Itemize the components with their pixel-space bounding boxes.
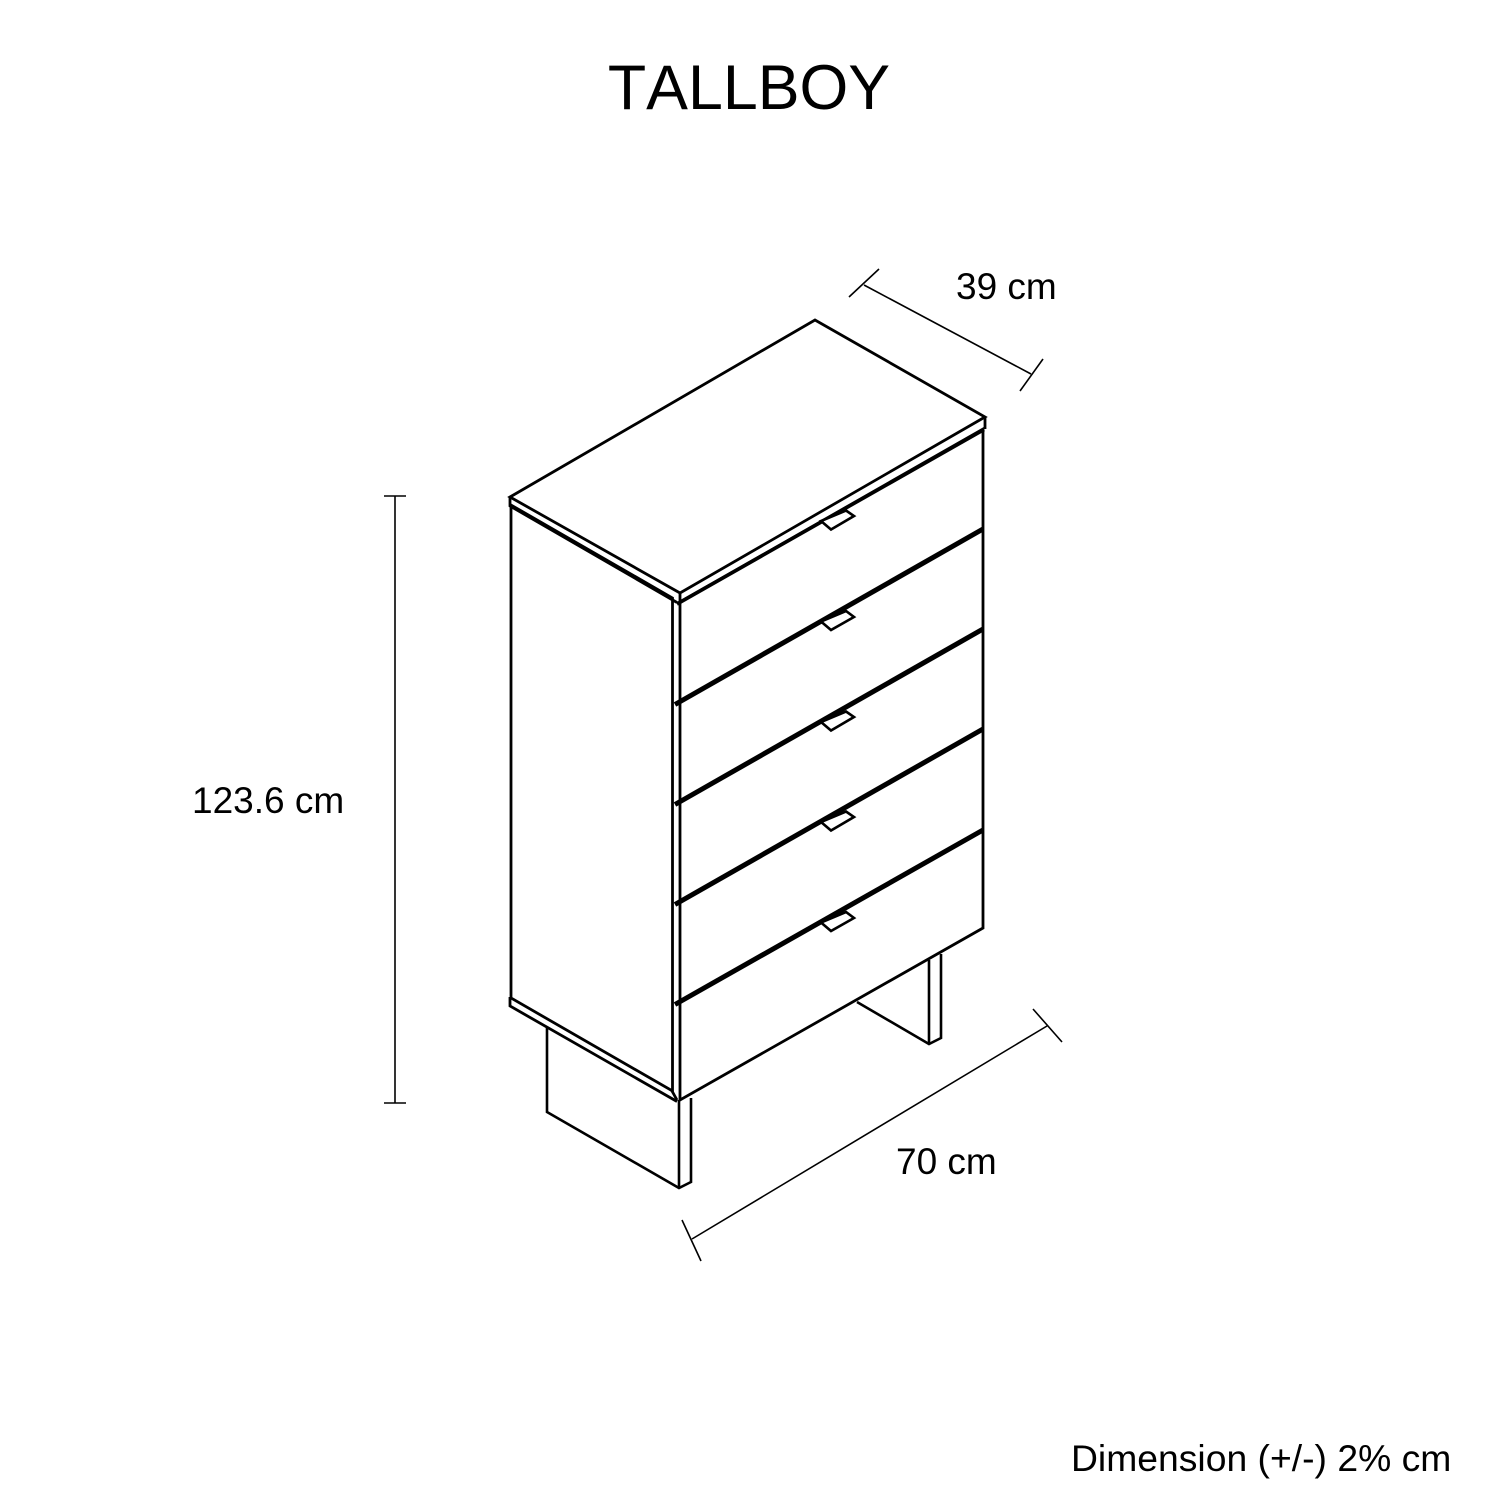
top surface and edge band	[510, 320, 985, 604]
dimension: width 70 cm	[682, 1009, 1062, 1261]
cabinet side panel	[511, 505, 672, 1091]
dimension: depth 39 cm: 39 cm	[956, 266, 1057, 307]
cabinet front face	[680, 429, 983, 1100]
title: TALLBOY	[608, 53, 890, 123]
tallboy line drawing	[510, 320, 985, 1188]
tolerance note: Dimension (+/-) 2% cm	[1071, 1437, 1451, 1479]
back right leg	[857, 954, 941, 1044]
dimension: height 123.6 cm: 123.6 cm	[192, 780, 344, 821]
dimension: width 70 cm: 70 cm	[896, 1141, 997, 1182]
drawer dividers	[675, 529, 983, 1004]
bottom edge band	[510, 997, 677, 1102]
drawer handles	[821, 510, 854, 931]
dimension: depth 39 cm	[849, 266, 1057, 391]
front left leg	[547, 1028, 691, 1188]
